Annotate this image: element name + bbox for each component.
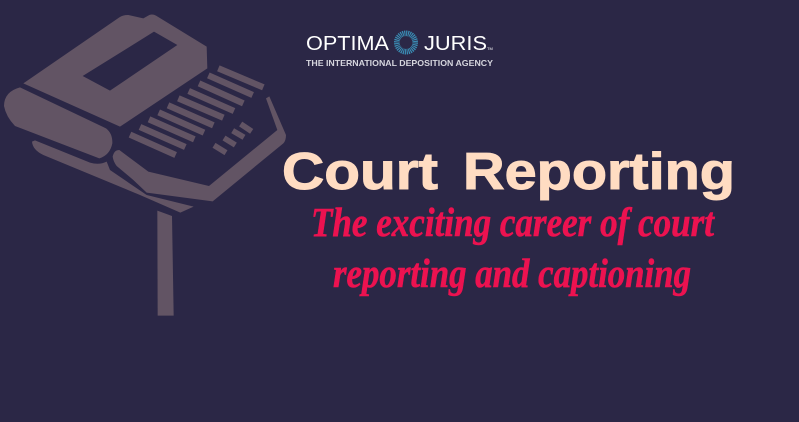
title: Court [282,143,438,201]
keyboard tray [113,96,286,201]
subtitle line 1: The exciting career of court [311,199,715,245]
icon: stenotype machine [4,14,286,316]
stand post [157,211,174,316]
logo wordmark: JURIS: JURIS [424,33,487,55]
keyboard keys [130,68,263,155]
trademark mark: TM [487,46,493,51]
machine body with paper window [23,14,207,127]
number keys [214,124,252,153]
logo tagline: THE INTERNATIONAL DEPOSITION AGENCY [306,58,493,68]
subtitle line 2: reporting and captioning [333,250,691,296]
title: Reporting [463,143,735,201]
subtitle [311,199,715,296]
roller [4,87,112,158]
logo [306,33,493,68]
title [282,143,735,201]
lower support [32,140,194,213]
logo ring [397,33,415,52]
logo wordmark: OPTIMA: OPTIMA [306,33,390,55]
